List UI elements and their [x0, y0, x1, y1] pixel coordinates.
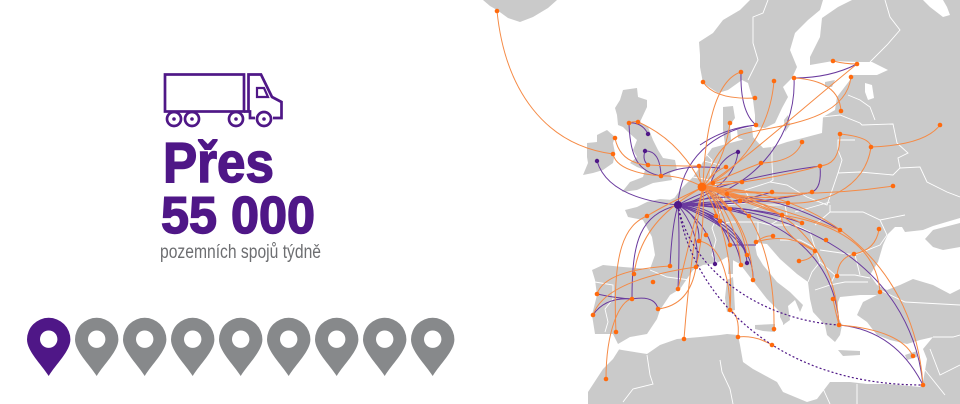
routes: orange [497, 11, 940, 385]
destination dots: purple [595, 132, 749, 266]
pin row: 1 of 9 highlighted [27, 318, 454, 376]
destination dots: orange [495, 9, 942, 387]
islands [483, 0, 917, 360]
heading: 55 000: 55 000 [161, 187, 315, 245]
heading: Přes: Přes [163, 131, 274, 195]
icon: truck [165, 74, 282, 126]
routes: purple [593, 64, 923, 385]
map of Europe [480, 0, 960, 404]
hub: orange [698, 183, 706, 191]
caption: pozemních spojů týdně [160, 242, 321, 263]
pins: grey [75, 318, 454, 376]
hub: purple [674, 201, 682, 209]
pin: highlighted [27, 318, 70, 376]
routes: dotted sea links [678, 205, 923, 385]
